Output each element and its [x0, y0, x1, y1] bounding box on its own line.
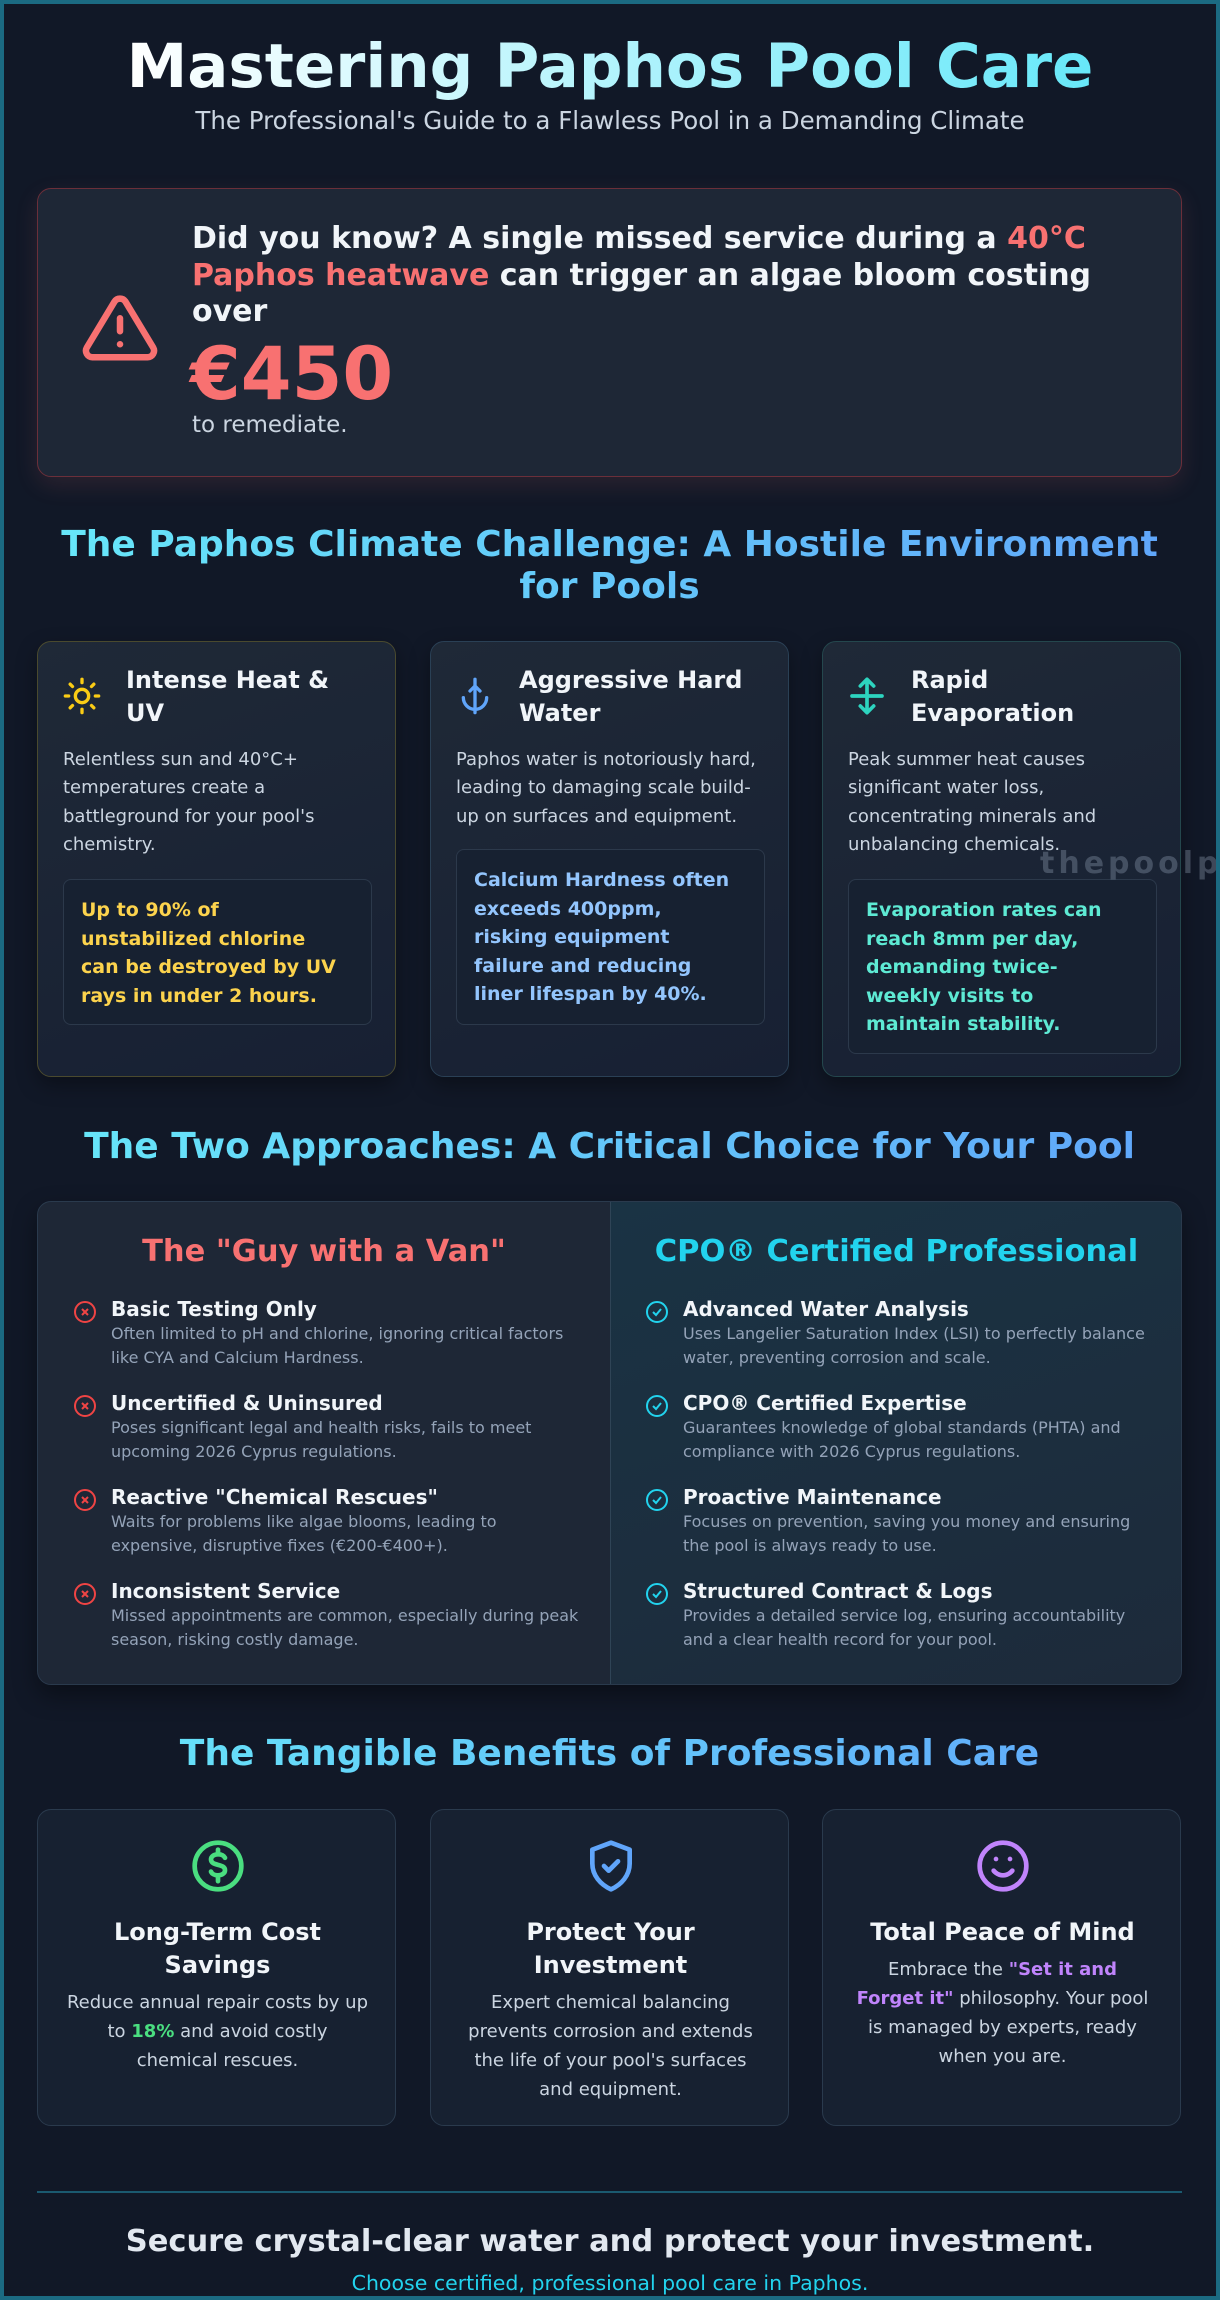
- alert footer: to remediate.: [192, 412, 348, 438]
- stat box: Evaporation rates can reach 8mm per day, demanding twice-weekly visits to maintain stability.: [866, 899, 1102, 1035]
- right item 4: Provides a detailed service log, ensuring accountability and a clear health record for your pool.: [683, 1606, 1125, 1649]
- heading: two approaches: The Two Approaches: A Critical Choice for Your Pool: [84, 1126, 1135, 1167]
- watermark: thepoolp: [1040, 846, 1220, 881]
- heading: benefits: The Tangible Benefits of Professional Care: [180, 1733, 1039, 1774]
- left item 3: Reactive "Chemical Rescues": [111, 1485, 438, 1509]
- left item 1: [74, 1297, 563, 1367]
- card: hard water: [430, 641, 789, 1077]
- benefit card: savings: to 18% and avoid costly: [107, 2021, 328, 2042]
- left item 4: [74, 1579, 578, 1649]
- right item 1: [646, 1297, 1145, 1367]
- left item 4: Missed appointments are common, especially during peak season, risking costly damage.: [111, 1606, 578, 1649]
- comparison panel: [37, 1201, 1182, 1685]
- alert text: Did you know? A single missed service during a 40°C Paphos heatwave can trigger an algae bloom costing over: [192, 221, 1091, 329]
- benefit card: protect: Protect Your Investment: [526, 1918, 695, 1979]
- benefit card: peace of mind: Total Peace of Mind: [870, 1918, 1135, 1946]
- benefit card: peace of mind: Embrace the "Set it and Forget it" philosophy. Your pool is managed by experts, ready when you are.: [857, 1959, 1148, 2067]
- icon: sun: [64, 678, 100, 714]
- left item 2: Uncertified & Uninsured: [111, 1391, 383, 1415]
- alert box: [37, 188, 1182, 477]
- left item 3: Waits for problems like algae blooms, leading to expensive, disruptive fixes (€200-€400+).: [111, 1512, 497, 1555]
- card: heat: Relentless sun and 40°C+ temperatures create a battleground for your pool's chemistry.: [63, 749, 314, 855]
- left heading: The "Guy with a Van": [142, 1234, 506, 1269]
- benefit card: protect: Expert chemical balancing prevents corrosion and extends the life of your pool's surfaces and equipment.: [468, 1992, 753, 2100]
- right item 3: Proactive Maintenance: [683, 1485, 942, 1509]
- card: evaporation: Rapid Evaporation: [911, 666, 1074, 727]
- stat box: Up to 90% of unstabilized chlorine can be destroyed by UV rays in under 2 hours.: [81, 899, 336, 1006]
- benefit card: savings: chemical rescues.: [137, 2050, 298, 2071]
- right item 1: Uses Langelier Saturation Index (LSI) to perfectly balance water, preventing corrosion and scale.: [683, 1324, 1145, 1367]
- left item 1: Often limited to pH and chlorine, ignoring critical factors like CYA and Calcium Hardness.: [111, 1324, 563, 1367]
- icon: anchor: [462, 678, 488, 714]
- footer headline: Secure crystal-clear water and protect your investment.: [126, 2224, 1094, 2259]
- card: heat: Intense Heat & UV: [126, 666, 329, 727]
- right item 2: [646, 1391, 1121, 1461]
- card: heat: [37, 641, 396, 1077]
- left item 3: [74, 1485, 497, 1555]
- footer subline: Choose certified, professional pool care in Paphos.: [352, 2271, 868, 2295]
- card: hard water: Paphos water is notoriously hard, leading to damaging scale build-up on surfaces and equipment.: [456, 749, 756, 827]
- stat box: [456, 849, 765, 1025]
- right heading: CPO® Certified Professional: [655, 1234, 1138, 1269]
- stat box: [848, 879, 1157, 1054]
- right item 4: Structured Contract & Logs: [683, 1579, 992, 1603]
- left item 4: Inconsistent Service: [111, 1579, 340, 1603]
- icon: shield: [590, 1840, 632, 1892]
- stat box: [63, 879, 372, 1025]
- right item 1: Advanced Water Analysis: [683, 1297, 969, 1321]
- benefit card: protect: [430, 1809, 789, 2126]
- benefit card: savings: Reduce annual repair costs by up: [67, 1992, 368, 2013]
- icon: dollar: [192, 1840, 244, 1892]
- card: evaporation: Peak summer heat causes significant water loss, concentrating minerals and unbalancing chemicals.: [848, 749, 1096, 855]
- icon: smile: [977, 1840, 1029, 1892]
- card: hard water: Aggressive Hard Water: [519, 666, 742, 727]
- stat box: Calcium Hardness often exceeds 400ppm, risking equipment failure and reducing liner lifespan by 40%.: [474, 869, 729, 1005]
- benefit card: savings: [37, 1809, 396, 2126]
- card: evaporation: [822, 641, 1181, 1077]
- icon: arrows: [850, 677, 884, 715]
- left item 2: Poses significant legal and health risks, fails to meet upcoming 2026 Cyprus regulations.: [111, 1418, 531, 1461]
- heading: climate challenge: The Paphos Climate Challenge: A Hostile Environment for Pools: [61, 524, 1158, 607]
- right item 2: Guarantees knowledge of global standards (PHTA) and compliance with 2026 Cyprus regulations.: [683, 1418, 1121, 1461]
- right item 2: CPO® Certified Expertise: [683, 1391, 967, 1415]
- benefit card: savings: Long-Term Cost Savings: [114, 1918, 321, 1979]
- benefit card: peace of mind: [822, 1809, 1181, 2126]
- title: Mastering Paphos Pool Care: [127, 31, 1093, 102]
- left item 2: [74, 1391, 531, 1461]
- right item 4: [646, 1579, 1125, 1649]
- subtitle: The Professional's Guide to a Flawless Pool in a Demanding Climate: [195, 106, 1025, 135]
- right item 3: [646, 1485, 1130, 1555]
- icon: warning triangle: [82, 295, 158, 360]
- big number: €450: [190, 332, 393, 417]
- left item 1: Basic Testing Only: [111, 1297, 317, 1321]
- right item 3: Focuses on prevention, saving you money and ensuring the pool is always ready to use.: [683, 1512, 1130, 1555]
